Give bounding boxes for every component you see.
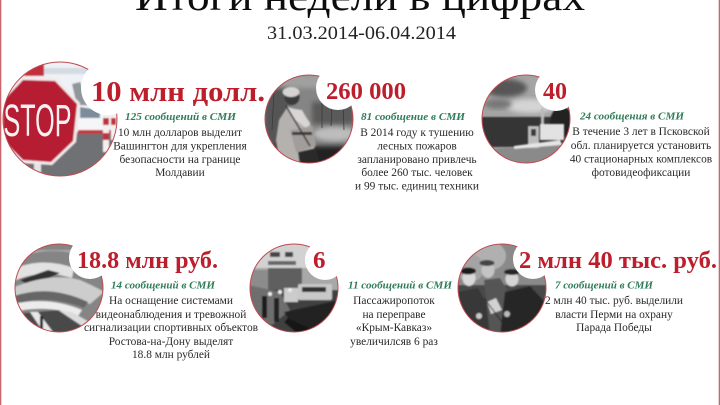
description: власти Перми на охрану	[555, 309, 673, 321]
photo: stop sign	[2, 62, 118, 176]
description: 10 млн долларов выделит	[118, 127, 242, 139]
photo: soldiers	[458, 244, 546, 332]
panel: Pskov region cameras	[480, 69, 712, 179]
description: и 99 тыс. единиц техники	[355, 180, 479, 192]
photo: ferry crossing	[250, 244, 338, 332]
description: фотовидеофиксации	[592, 167, 690, 179]
description: Вашингтон для укрепления	[113, 140, 248, 152]
description	[570, 126, 712, 179]
description: увеличилсяв 6 раз	[350, 336, 438, 348]
description: Парада Победы	[576, 322, 652, 334]
description: Ростова-на-Дону выделят	[109, 336, 233, 348]
figure: 10 million dollars: 10 млн долл.	[91, 76, 265, 108]
description: В течение 3 лет в Псковской	[572, 126, 710, 138]
description: 40 стационарных комплексов	[570, 154, 712, 166]
description: Пассажиропоток	[353, 295, 435, 307]
description: на переправе	[362, 309, 426, 321]
description: В 2014 году к тушению	[360, 127, 474, 139]
panel: Perm parade	[456, 239, 717, 336]
panel: Rostov stadiums	[12, 237, 258, 361]
figure: 2 million 40 thousand rubles: 2 млн 40 тыс. руб.	[519, 248, 717, 274]
description: Молдавии	[155, 167, 205, 179]
photo: region sign	[482, 74, 570, 164]
panel: Crimea-Caucasus ferry	[248, 240, 452, 348]
photo: firefighter	[264, 74, 354, 164]
figure: 6: 6	[313, 248, 326, 274]
description: «Крым-Кавказ»	[356, 322, 432, 334]
mentions count: 125 сообщений в СМИ	[125, 111, 236, 123]
mentions count: 11 сообщений в СМИ	[348, 280, 452, 292]
description	[84, 295, 258, 361]
photo: stadium	[14, 244, 104, 332]
description	[545, 295, 683, 334]
description: безопасности на границе	[120, 154, 240, 166]
description: лесных пожаров	[377, 140, 457, 152]
description	[113, 127, 248, 179]
photo: stop sign: STOP	[4, 95, 72, 146]
date range: 31.03.2014-06.04.2014	[267, 23, 457, 44]
description: видеонаблюдения и тревожной	[96, 309, 246, 321]
mentions count: 81 сообщение в СМИ	[361, 111, 465, 123]
panel: border security	[0, 60, 265, 180]
description: более 260 тыс. человек	[361, 167, 473, 179]
figure: 18.8 million rubles: 18.8 млн руб.	[77, 248, 218, 274]
mentions count: 24 сообщения в СМИ	[579, 110, 684, 122]
description: обл. планируется установить	[571, 140, 711, 152]
description	[355, 127, 479, 192]
figure: 260 000: 260 000	[326, 79, 406, 105]
description: 2 млн 40 тыс. руб. выделили	[545, 295, 683, 307]
description	[350, 295, 438, 348]
description: запланировано привлечь	[357, 154, 477, 166]
figure: 40: 40	[543, 79, 567, 105]
description: На оснащение системами	[109, 295, 233, 307]
description: сигнализации спортивных объектов	[84, 322, 258, 334]
description: 18.8 млн рублей	[132, 349, 210, 361]
mentions count: 14 сообщений в СМИ	[111, 280, 215, 292]
mentions count: 7 сообщений в СМИ	[555, 280, 653, 292]
panel: forest fires	[264, 66, 479, 192]
